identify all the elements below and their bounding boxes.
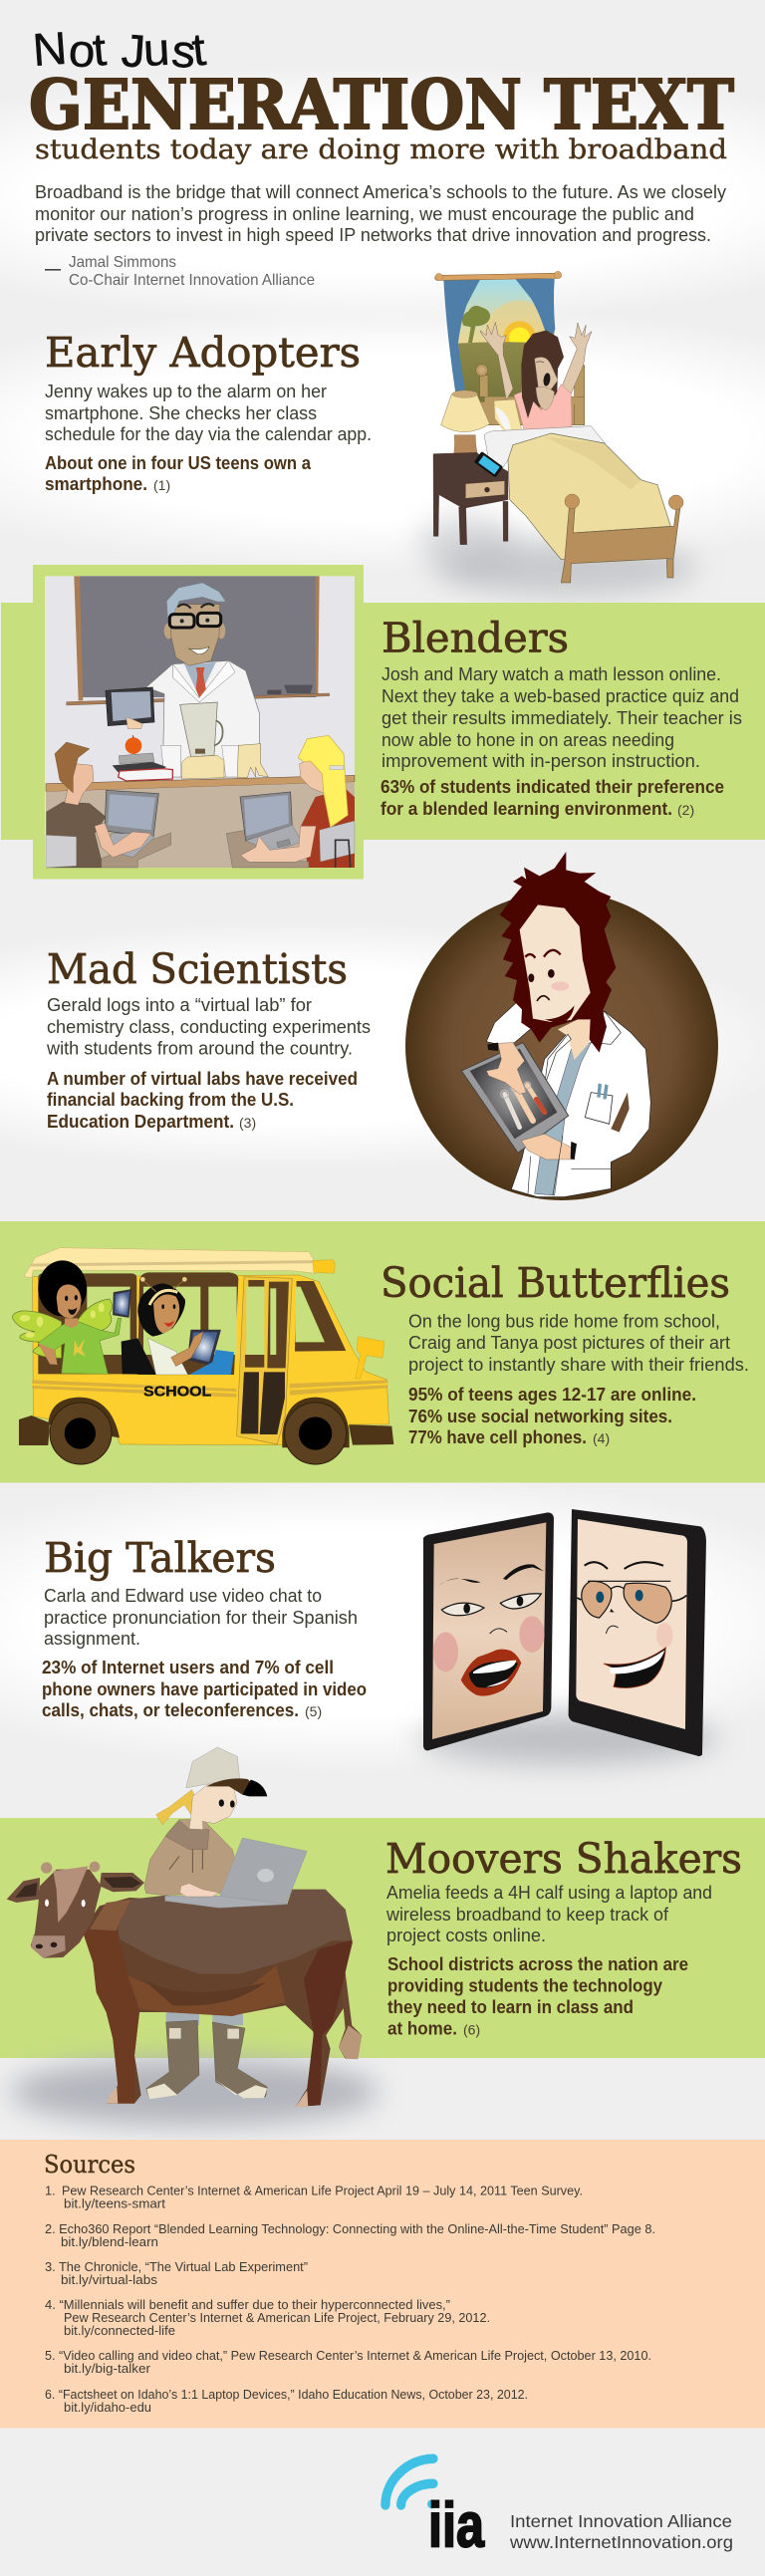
description: Amelia feeds a 4H calf using a laptop and — [386, 1882, 712, 1903]
statistic: 23% of Internet users and 7% of cell — [42, 1657, 334, 1677]
heading: Moovers Shakers — [385, 1835, 742, 1883]
heading: Big Talkers — [44, 1534, 276, 1582]
description: wireless broadband to keep track of — [385, 1904, 669, 1925]
statistics — [408, 1384, 696, 1447]
statistic: (6) — [463, 2022, 480, 2038]
source list: bit.ly/idaho-edu — [64, 2400, 151, 2415]
statistic: A number of virtual labs have received — [47, 1068, 358, 1089]
panel: big talkers — [42, 1509, 717, 1764]
description: project costs online. — [386, 1925, 546, 1945]
statistic: (1) — [153, 477, 170, 493]
description: Josh and Mary watch a math lesson online. — [382, 663, 721, 684]
statistic: calls, chats, or teleconferences. — [42, 1699, 299, 1720]
organisation name: Internet Innovation Alliance — [510, 2511, 732, 2531]
description: with students from around the country. — [46, 1038, 353, 1058]
statistic: Education Department. — [47, 1111, 234, 1132]
source list: bit.ly/virtual-labs — [61, 2272, 157, 2287]
source list: 1. — [45, 2184, 56, 2197]
panel: early adopters — [45, 271, 697, 596]
source list — [45, 2184, 655, 2415]
heading: Social Butterflies — [381, 1259, 730, 1307]
source list: bit.ly/big-talker — [64, 2361, 151, 2376]
footer logo — [385, 2458, 733, 2560]
panel: blenders — [1, 565, 765, 879]
statistic: (5) — [305, 1703, 322, 1719]
illustration: school bus — [13, 1248, 393, 1464]
green band — [0, 1221, 765, 1482]
description: Gerald logs into a “virtual lab” for — [47, 994, 312, 1015]
source list: bit.ly/connected-life — [64, 2323, 175, 2338]
logo wordmark: iia — [428, 2490, 485, 2560]
source list: 3. The Chronicle, “The Virtual Lab Experiment” — [45, 2259, 308, 2274]
statistic: smartphone. — [45, 473, 147, 494]
statistics: (4) — [593, 1430, 610, 1446]
source list: bit.ly/teens-smart — [64, 2195, 165, 2211]
statistic: for a blended learning environment. — [381, 798, 672, 819]
header — [29, 22, 734, 289]
source list: bit.ly/blend-learn — [61, 2234, 158, 2249]
description: chemistry class, conducting experiments — [47, 1016, 371, 1037]
subtitle: students today are doing more with broadband — [35, 134, 727, 165]
statistic — [45, 452, 312, 494]
green band — [0, 1818, 765, 2058]
description: smartphone. She checks her class — [45, 402, 317, 423]
statistic: providing students the technology — [387, 1974, 663, 1996]
organisation name: www.InternetInnovation.org — [509, 2532, 733, 2552]
statistic: 63% of students indicated their preference — [381, 776, 724, 797]
illustration: girl waking in bed — [418, 271, 697, 596]
statistic — [387, 1953, 688, 2038]
description: On the long bus ride home from school, — [408, 1311, 720, 1331]
statistic — [42, 1657, 367, 1720]
source list: Pew Research Center’s Internet & American Life Project April 19 – July 14, 2011 Teen Survey. — [62, 2184, 583, 2197]
source list: 5. “Video calling and video chat,” Pew Research Center’s Internet & American Life Project, October 13, 2010. — [45, 2348, 651, 2363]
statistic: School districts across the nation are — [387, 1953, 688, 1974]
statistic: financial backing from the U.S. — [47, 1089, 294, 1110]
sources background — [0, 2140, 765, 2429]
intro quote: Broadband is the bridge that will connect America’s schools to the future. As we closely — [35, 181, 727, 202]
statistic: (3) — [239, 1115, 256, 1131]
source list: 6. “Factsheet on Idaho’s 1:1 Laptop Devices,” Idaho Education News, October 23, 2012. — [45, 2387, 528, 2402]
heading: Early Adopters — [45, 329, 361, 377]
description: Jenny wakes up to the alarm on her — [45, 381, 327, 401]
description: schedule for the day via the calendar app. — [45, 423, 372, 444]
panel: social butterflies — [0, 1221, 765, 1482]
statistics: 77% have cell phones. — [408, 1426, 587, 1447]
bus lettering: SCHOOL — [143, 1385, 211, 1401]
illustration: girl with laptop and calf — [7, 1747, 379, 2126]
illustration: two tablets with faces — [418, 1509, 717, 1764]
heading: Mad Scientists — [47, 945, 348, 993]
statistic: About one in four US teens own a — [45, 452, 312, 473]
description: now able to hone in on areas needing — [382, 729, 674, 750]
heading: Blenders — [382, 614, 569, 661]
intro quote: private sectors to invest in high speed IP networks that drive innovation and progress. — [35, 224, 711, 245]
source list: 4. “Millennials will benefit and suffer due to their hyperconnected lives,” — [45, 2297, 450, 2312]
attribution: Co-Chair Internet Innovation Alliance — [69, 272, 315, 289]
green band — [1, 603, 765, 840]
source list: Pew Research Center’s Internet & American Life Project, February 29, 2012. — [64, 2310, 490, 2325]
description — [44, 1585, 358, 1649]
statistics: 76% use social networking sites. — [408, 1406, 672, 1426]
panel: sources — [0, 2140, 765, 2429]
statistic: at home. — [387, 2018, 457, 2038]
attribution — [45, 254, 315, 289]
illustration: teacher and blender classroom — [45, 576, 355, 868]
illustration: scientist in circle — [405, 852, 718, 1200]
description — [45, 381, 372, 444]
description: Carla and Edward use video chat to — [44, 1585, 322, 1606]
statistics: 95% of teens ages 12-17 are online. — [408, 1384, 696, 1405]
description — [408, 1311, 749, 1375]
title: Not Just: Not Just — [31, 22, 208, 78]
statistic — [381, 776, 724, 819]
intro quote: monitor our nation’s progress in online learning, we must encourage the public and — [35, 203, 694, 224]
panel: moovers shakers — [0, 1747, 765, 2126]
intro quote — [35, 181, 727, 245]
statistic — [47, 1068, 358, 1132]
description: assignment. — [44, 1628, 140, 1649]
description: practice pronunciation for their Spanish — [44, 1607, 358, 1628]
description — [385, 1882, 712, 1945]
description: improvement with in-person instruction. — [382, 750, 700, 771]
description: Craig and Tanya post pictures of their art — [408, 1332, 730, 1353]
sources heading: Sources — [44, 2151, 135, 2179]
attribution: Jamal Simmons — [69, 254, 176, 271]
statistic: phone owners have participated in video — [42, 1678, 367, 1699]
description: project to instantly share with their friends. — [408, 1354, 749, 1375]
description: get their results immediately. Their teacher is — [382, 707, 742, 728]
organisation name — [509, 2511, 733, 2552]
photo frame — [33, 565, 364, 879]
panel: mad scientists — [46, 852, 718, 1200]
statistic: (2) — [677, 802, 694, 818]
statistic: they need to learn in class and — [387, 1996, 634, 2017]
source list: 2. Echo360 Report “Blended Learning Technology: Connecting with the Online-All-the-Time Student” Page 8. — [45, 2221, 655, 2236]
icon: wifi arcs — [385, 2458, 436, 2508]
description — [46, 994, 371, 1058]
description: Next they take a web-based practice quiz and — [382, 685, 739, 706]
description — [382, 663, 742, 771]
